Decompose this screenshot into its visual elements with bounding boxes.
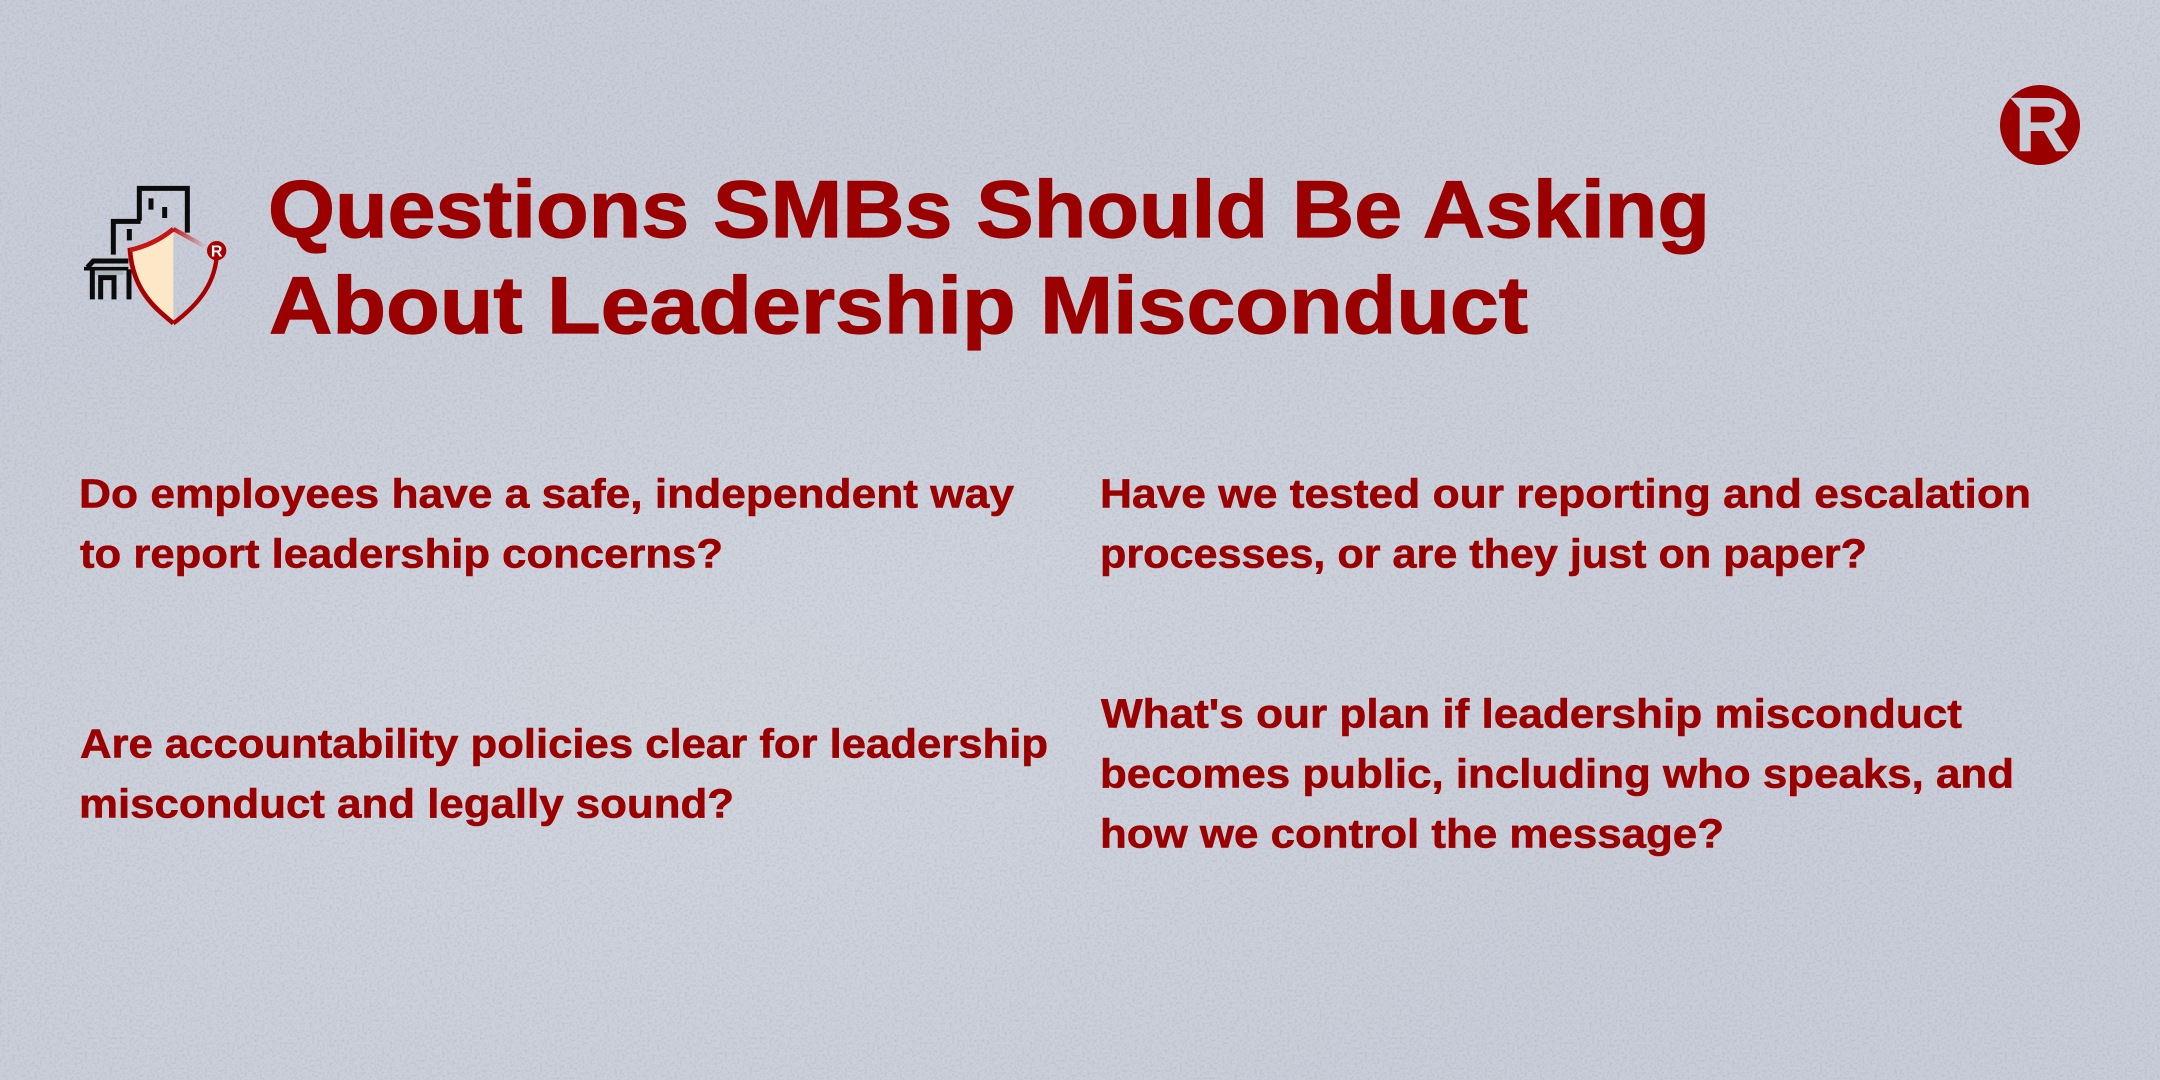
title: About Leadership Misconduct (269, 261, 1528, 351)
title: Questions SMBs Should Be Asking (268, 165, 1710, 255)
question: tested processes: processes, or are they just on paper? (1100, 531, 1867, 577)
question: accountability policies (79, 721, 1048, 827)
question: safe reporting: to report leadership concerns? (80, 531, 723, 577)
logo: R badge (2000, 82, 2080, 168)
question: public plan: What's our plan if leadership misconduct (1101, 691, 1962, 737)
question: accountability policies: misconduct and legally sound? (79, 781, 734, 827)
question: tested processes: Have we tested our reporting and escalation (1100, 471, 2031, 517)
question: safe reporting: Do employees have a safe, independent way (79, 471, 1015, 517)
question: accountability policies: Are accountability policies clear for leadership (80, 721, 1048, 767)
question: public plan (1100, 691, 2014, 857)
question: safe reporting (79, 471, 1015, 577)
question: tested processes (1100, 471, 2031, 577)
icon: buildings (84, 188, 187, 299)
icon: shield (130, 229, 226, 323)
title (268, 165, 1710, 351)
question: public plan: how we control the message? (1100, 811, 1724, 857)
icon: building with shield (84, 188, 226, 323)
question: public plan: becomes public, including who speaks, and (1100, 751, 2014, 797)
logo: R badge: R (2014, 82, 2070, 168)
icon: shield: R (211, 244, 223, 261)
